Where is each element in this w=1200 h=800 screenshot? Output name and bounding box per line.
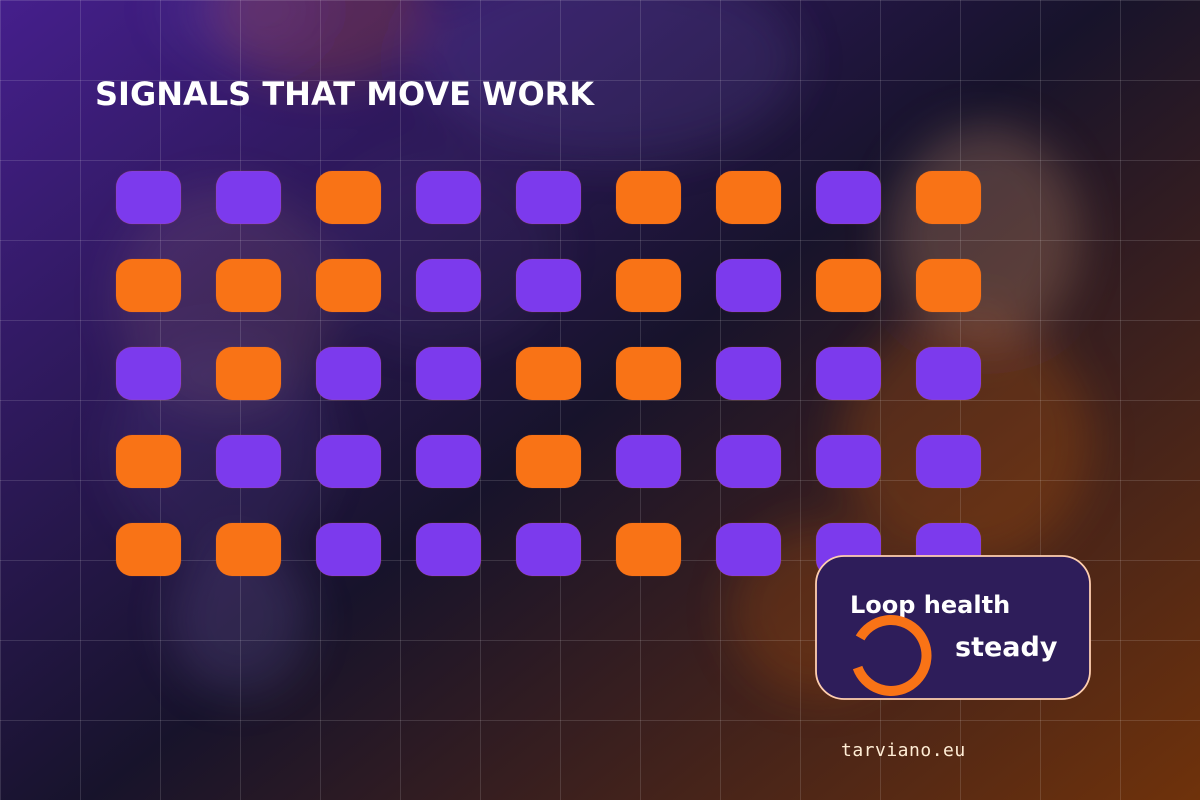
title: SIGNALS THAT MOVE WORK [95, 75, 595, 113]
row 5 [116, 523, 981, 576]
row 2 [116, 259, 981, 312]
row 4 [116, 435, 981, 488]
signal tile grid [116, 171, 981, 576]
status value: steady [955, 632, 1058, 663]
panel: loop health [816, 556, 1090, 699]
icon: progress ring [858, 620, 926, 691]
panel label: Loop health [850, 591, 1010, 619]
row 3 [116, 347, 981, 400]
footer url: tarviano.eu [841, 740, 966, 761]
row 1 [116, 171, 981, 224]
